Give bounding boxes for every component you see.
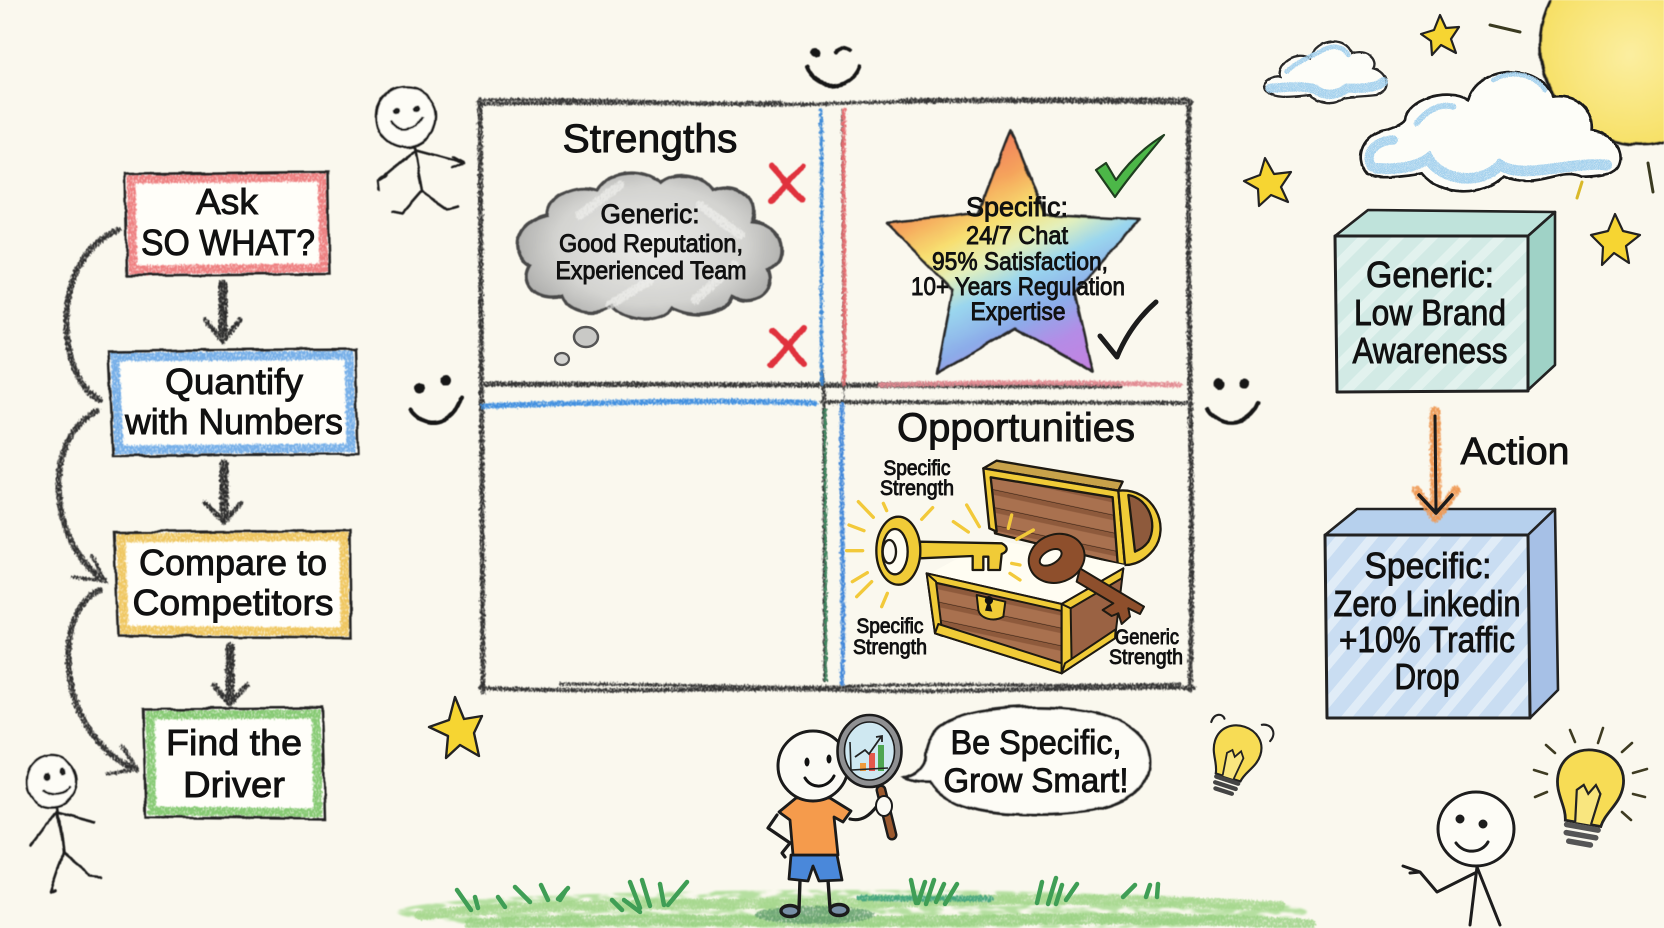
chest base [927, 568, 1123, 673]
box: compare to competitors [114, 530, 351, 638]
icon: star near grid bottom left [429, 697, 482, 758]
icon: star beside cloud [1244, 158, 1291, 206]
arrow: curved loop three [68, 590, 137, 774]
thought cloud: generic strengths: Generic: [600, 199, 700, 229]
icon: big light bulb [1534, 728, 1647, 849]
box: ask so what: Ask [196, 181, 259, 222]
label: specific strength upper: Specific [884, 457, 950, 480]
speech bubble [904, 707, 1150, 815]
label: generic strength: Generic [1115, 626, 1179, 649]
speech bubble: Grow Smart! [944, 762, 1128, 800]
thought cloud: generic strengths [517, 173, 781, 365]
3d box: specific: Zero Linkedin [1334, 583, 1520, 624]
rainbow star: specific strengths: 95% Satisfaction, [932, 248, 1108, 276]
thought cloud: generic strengths: Experienced Team [556, 257, 746, 285]
box: compare to competitors: Compare to [139, 542, 327, 583]
chest glow [930, 540, 1125, 602]
arrow: action [1416, 412, 1456, 518]
arrow: curved loop one [66, 230, 118, 400]
rainbow star: specific strengths: Expertise [970, 298, 1066, 326]
box: quantify with numbers: with Numbers [124, 401, 343, 442]
gold key [876, 517, 1007, 585]
icon: green check [1096, 135, 1164, 197]
treasure chest with keys [847, 461, 1161, 673]
icon: red cross bottom [771, 328, 804, 365]
grid frame lines [478, 99, 1194, 692]
arrow: ask to quantify [205, 284, 240, 341]
3d box: specific: +10% Traffic [1339, 619, 1515, 660]
keyhole [985, 596, 993, 612]
arrow: compare to driver [214, 647, 247, 704]
glow rays [847, 502, 1033, 607]
magnifying glass [838, 715, 902, 835]
thought cloud: generic strengths: Good Reputation, [559, 230, 743, 258]
shorts [789, 855, 842, 881]
label: specific strength lower: Specific [856, 615, 924, 638]
rainbow star: specific strengths: 10+ Years Regulation [911, 273, 1125, 301]
arrow: curved loop two [59, 411, 105, 581]
box: quantify with numbers [108, 349, 358, 456]
character: child with magnifying glass [768, 715, 902, 916]
shirt [779, 798, 851, 855]
icon: small light bulb [1192, 708, 1276, 800]
3d box: specific: Specific: [1364, 545, 1492, 586]
3d box: specific: Drop [1394, 656, 1460, 697]
label: specific strength lower [853, 615, 927, 659]
grid colour lines [483, 110, 1180, 684]
stick figure: bottom right [1403, 792, 1514, 925]
label: specific strength upper [880, 457, 954, 500]
icon: star right [1591, 214, 1640, 265]
3d box: generic: Awareness [1352, 330, 1508, 371]
box: ask so what [125, 172, 330, 276]
smiley: top [806, 47, 860, 86]
arrow: quantify to compare [205, 464, 241, 522]
panel: swot grid [478, 99, 1194, 692]
3d box: specific [1325, 509, 1558, 718]
right arm [850, 806, 877, 820]
legs and feet [781, 880, 848, 916]
speech bubble: Be Specific, [950, 724, 1122, 762]
label: generic strength: Strength [1109, 646, 1183, 669]
ground: grass [397, 878, 1310, 928]
heading: strengths: Strengths [562, 117, 738, 161]
box: compare to competitors: Competitors [132, 582, 334, 623]
icon: red cross top [771, 166, 803, 201]
icon: small cloud [1264, 41, 1387, 103]
label: specific strength upper: Strength [880, 477, 954, 500]
box: quantify with numbers: Quantify [165, 361, 303, 402]
box: ask so what: SO WHAT? [141, 222, 315, 263]
3d box: generic [1335, 210, 1555, 392]
left arm [768, 815, 790, 857]
3d box: generic: Generic: [1366, 254, 1494, 295]
box: find the driver [143, 708, 325, 819]
head [778, 731, 848, 801]
heading: opportunities: Opportunities [897, 406, 1135, 450]
panel: process flow [59, 172, 358, 819]
rusty key [1022, 526, 1144, 624]
icon: star top right [1421, 15, 1459, 55]
smiley: left [411, 376, 462, 423]
rainbow star: specific strengths: 24/7 Chat [966, 222, 1068, 250]
label: generic strength [1109, 626, 1183, 669]
stick figure: bottom left [27, 755, 102, 892]
stick figure: top left [376, 87, 463, 214]
box: find the driver: Driver [183, 764, 285, 805]
rainbow star: specific strengths [887, 130, 1139, 373]
icon: big cloud [1361, 72, 1621, 191]
3d box: generic: Low Brand [1354, 292, 1506, 333]
icon: black check [1100, 302, 1156, 357]
chest lid [983, 461, 1161, 565]
label: action: Action [1460, 431, 1570, 473]
rainbow star: specific strengths: Specific: [966, 192, 1068, 222]
box: find the driver: Find the [166, 722, 302, 763]
icon: sun [1490, 0, 1664, 198]
label: specific strength lower: Strength [853, 636, 927, 659]
smiley: right [1207, 380, 1258, 422]
